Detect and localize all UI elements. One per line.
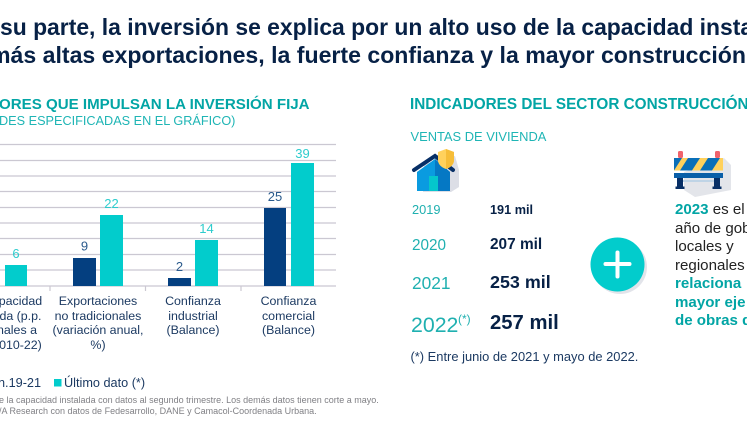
bar chart xyxy=(0,144,336,291)
bars: confianza industrial: 2 xyxy=(176,259,183,274)
category labels: Confianza xyxy=(165,294,221,308)
footnotes: /A Research con datos de Fedesarrollo, DANE y Camacol-Coordenada Urbana. xyxy=(0,406,317,416)
category labels xyxy=(0,294,317,352)
title xyxy=(0,14,747,68)
bars: confianza comercial: 25 xyxy=(268,189,282,204)
callout text: 2023: mayor eje xyxy=(675,294,745,311)
row 2021 xyxy=(412,272,551,293)
bars: capacidad instalada xyxy=(5,246,27,286)
icon: road barrier xyxy=(674,151,731,197)
bars: confianza industrial xyxy=(168,221,218,286)
subheading: home sales: VENTAS DE VIVIENDA xyxy=(410,129,547,144)
sales footnote: (*) Entre junio de 2021 y mayo de 2022. xyxy=(410,349,638,364)
callout text: 2023: relaciona xyxy=(675,275,742,292)
category labels: industrial xyxy=(168,309,218,323)
bars: exportaciones: 22 xyxy=(104,196,119,211)
row 2022 xyxy=(411,312,559,337)
row 2021: 2021 xyxy=(412,273,450,293)
icon: house with shield xyxy=(414,149,459,192)
row 2019: 191 mil xyxy=(490,203,533,217)
bars: confianza comercial: 39 xyxy=(295,146,310,161)
category labels: Exportaciones xyxy=(59,294,137,308)
row 2019 xyxy=(412,202,533,217)
heading: left chart: ORES QUE IMPULSAN LA INVERSIÓN FIJA xyxy=(0,95,310,113)
row 2022: (*) xyxy=(458,312,471,326)
callout text: 2023: 2023 es el xyxy=(675,201,745,218)
bars: confianza industrial: 14 xyxy=(199,221,214,236)
sales table xyxy=(411,202,559,337)
category labels: Confianza xyxy=(261,294,317,308)
row 2019: 2019 xyxy=(412,202,440,217)
callout text: 2023: regionales xyxy=(675,257,745,274)
row 2022: 2022 xyxy=(411,313,458,337)
bars: exportaciones xyxy=(73,196,123,286)
footnotes xyxy=(0,395,379,416)
bars: capacidad instalada: 6 xyxy=(12,246,20,261)
heading: left chart xyxy=(0,95,310,128)
category labels: (Balance) xyxy=(262,323,315,337)
category labels: %) xyxy=(90,338,106,352)
heading: left chart: DES ESPECIFICADAS EN EL GRÁFICO) xyxy=(0,113,235,128)
row 2022: 257 mil xyxy=(490,312,559,334)
legend xyxy=(0,375,145,390)
callout text: 2023 xyxy=(675,201,747,329)
category labels: (variación anual, xyxy=(53,323,143,337)
category labels: comercial xyxy=(262,309,315,323)
row 2020 xyxy=(412,236,542,254)
legend: Último dato (*) xyxy=(64,375,145,390)
title: más altas exportaciones, la fuerte confianza y la mayor construcción xyxy=(0,42,746,68)
category labels: no tradicionales xyxy=(55,309,141,323)
row 2021: 253 mil xyxy=(490,272,551,292)
category labels: (Balance) xyxy=(166,323,220,337)
footnotes: e la capacidad instalada con datos al segundo trimestre. Los demás datos tienen corte a mayo. xyxy=(0,395,379,405)
heading: construction: INDICADORES DEL SECTOR CONSTRUCCIÓN xyxy=(410,95,747,113)
row 2020: 207 mil xyxy=(490,236,542,253)
icon: plus circle xyxy=(590,238,647,294)
row 2020: 2020 xyxy=(412,237,446,254)
bars: exportaciones: 9 xyxy=(81,238,88,254)
bars: confianza comercial xyxy=(264,146,314,286)
callout text: 2023: locales y xyxy=(675,238,734,255)
